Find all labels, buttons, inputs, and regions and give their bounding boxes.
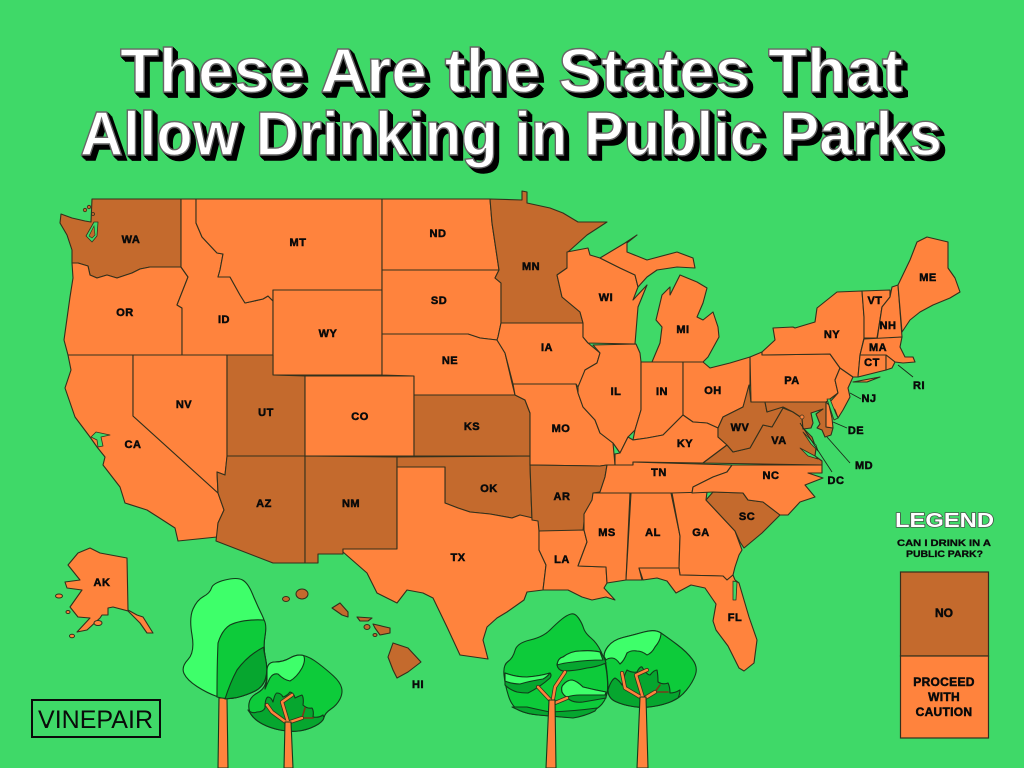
state: NE [382,334,515,395]
state labels: AZ [256,498,272,510]
DC marker [800,415,804,419]
state labels: CA [125,439,141,451]
state: AZ [216,456,305,563]
state: LA [539,530,615,600]
state: CO [305,376,414,456]
state labels: MA [869,342,887,354]
trunk [218,698,228,768]
state labels: MI [676,324,690,336]
title [80,37,942,169]
state labels: RI [913,380,925,392]
tree 2 [248,655,342,768]
canopy light [265,655,304,689]
state: TN [593,462,732,493]
canopy dark [248,692,324,731]
state: CT [858,355,886,377]
state: NM [305,456,397,563]
state: NV [133,355,227,493]
branches [538,672,567,705]
state: WA [60,199,181,278]
bottom shade [512,707,597,718]
legend swatch: no [900,572,988,656]
title: Allow Drinking in Public Parks [80,100,942,169]
state labels: MD [855,460,873,472]
state: KS [414,395,530,456]
state labels: NV [176,399,192,411]
legend swatch: proceed with caution: PROCEED [913,675,975,689]
state: GA [672,492,742,580]
state: MI upper peninsula [600,235,695,287]
leader lines [800,365,913,472]
state: PA [750,352,840,402]
state: RI [886,355,895,370]
state labels: ID [218,314,230,326]
state: WV [718,385,783,452]
state labels: PA [784,375,800,387]
canopy dark [225,647,267,699]
state: KY [615,415,727,465]
canopy light [183,578,267,699]
state: WI [557,248,647,344]
canopy shade [608,667,680,707]
state labels: VA [771,435,787,447]
state labels [94,228,937,691]
legend question: PUBLIC PARK? [906,549,983,560]
state: MS [578,493,630,583]
state: IA [497,323,600,387]
state: MD [765,402,833,437]
state: ID [177,199,273,355]
legend swatch: proceed with caution: CAUTION [916,705,972,719]
legend swatch: proceed with caution: WITH [928,690,960,704]
state labels: NC [763,470,779,482]
state labels: SC [739,511,755,523]
state: IN [633,362,683,440]
trunk [637,697,648,768]
state: TX [343,467,546,659]
legend [895,510,994,738]
state labels: KY [677,438,693,450]
state: NC [692,465,823,515]
state labels: IA [541,342,553,354]
state: UT [227,355,305,456]
state: WY [273,290,382,375]
state labels: KS [464,421,480,433]
state labels: WY [319,328,338,340]
state labels: UT [258,407,274,419]
state: VA [703,408,822,465]
state labels: NJ [861,393,877,405]
state: VT [862,290,890,338]
state labels: MT [290,237,306,249]
state: AL [626,493,680,580]
state: SD [382,270,501,340]
trunk [546,700,556,768]
state: NH [877,285,902,340]
water cut-outs: bays and inlets [86,222,838,600]
left foliage shade [505,673,551,693]
state labels: CO [351,411,369,423]
state labels: TN [651,467,667,479]
canopy highlight [604,631,661,664]
state: OK [397,456,532,520]
legend question [897,538,991,560]
state: OH [683,357,750,428]
state labels: FL [728,612,742,624]
state labels: WI [599,292,613,304]
state: NY Long Island [853,377,880,382]
state labels: HI [412,679,424,691]
state labels: NM [342,498,360,510]
Puget Sound islets [83,205,94,216]
branches [622,670,668,698]
canopy mid [249,655,342,731]
state: MI lower peninsula [652,275,719,362]
state labels: NY [824,329,840,341]
state: CA [65,355,224,541]
state: ME [898,237,960,332]
state labels: LA [554,554,570,566]
state labels: AK [94,577,110,589]
state: MN [490,191,607,323]
state labels: AR [554,491,570,503]
legend swatch: no: NO [935,606,953,620]
state: SC [706,492,780,548]
title: These Are the States That [120,37,903,106]
state labels: CT [864,357,880,369]
state labels: DC [828,475,844,487]
state labels: ND [430,228,446,240]
canopy [604,631,696,707]
state: IL [578,344,641,453]
state labels: DE [848,425,864,437]
state: NJ [829,368,853,418]
state: OR [64,263,188,355]
upper right foliage highlight [557,651,603,665]
state labels: NE [442,355,458,367]
Puget Sound island [89,226,95,238]
branches [267,695,313,723]
trunk [284,722,293,768]
state labels: IN [656,386,668,398]
state labels: MS [598,527,616,539]
canopy [504,614,608,717]
state labels: MO [552,423,570,435]
state labels: NH [880,320,896,332]
state labels: TX [450,552,466,564]
state: AR [530,465,607,531]
state labels: GA [692,527,710,539]
state labels: WV [731,422,750,434]
canopy mid [217,620,267,699]
state labels: ME [919,272,937,284]
middle right foliage shade [562,680,606,702]
map of US states [56,191,960,678]
state: DE [826,402,833,428]
state: MT [196,199,382,303]
state: NY [762,291,864,377]
legend question: CAN I DRINK IN A [897,538,991,549]
tree 4 [604,631,696,768]
state: HI [282,589,421,678]
Alaska islands [56,594,102,638]
state labels: VT [867,295,883,307]
state labels: IL [611,386,621,398]
tree 1 [183,578,267,768]
state: MA [860,337,915,363]
left foliage highlight [505,673,550,684]
legend heading: LEGEND [895,510,994,532]
state: FL [639,568,757,671]
logo: VinePair: VINEPAIR [38,706,153,734]
logo: VinePair [32,700,160,737]
tree 3 [504,614,608,768]
state labels: SD [431,295,447,307]
state: MO [513,384,615,466]
middle right foliage highlight [562,680,606,697]
state labels: AL [645,527,661,539]
upper right foliage shade [557,651,606,671]
state: AK [65,548,153,633]
state labels: WA [122,234,140,246]
state labels: OH [704,385,722,397]
legend swatch: proceed with caution [900,656,988,738]
state labels: MN [522,261,540,273]
state labels: OK [480,483,498,495]
state: ND [382,199,499,270]
state labels: OR [116,307,134,319]
